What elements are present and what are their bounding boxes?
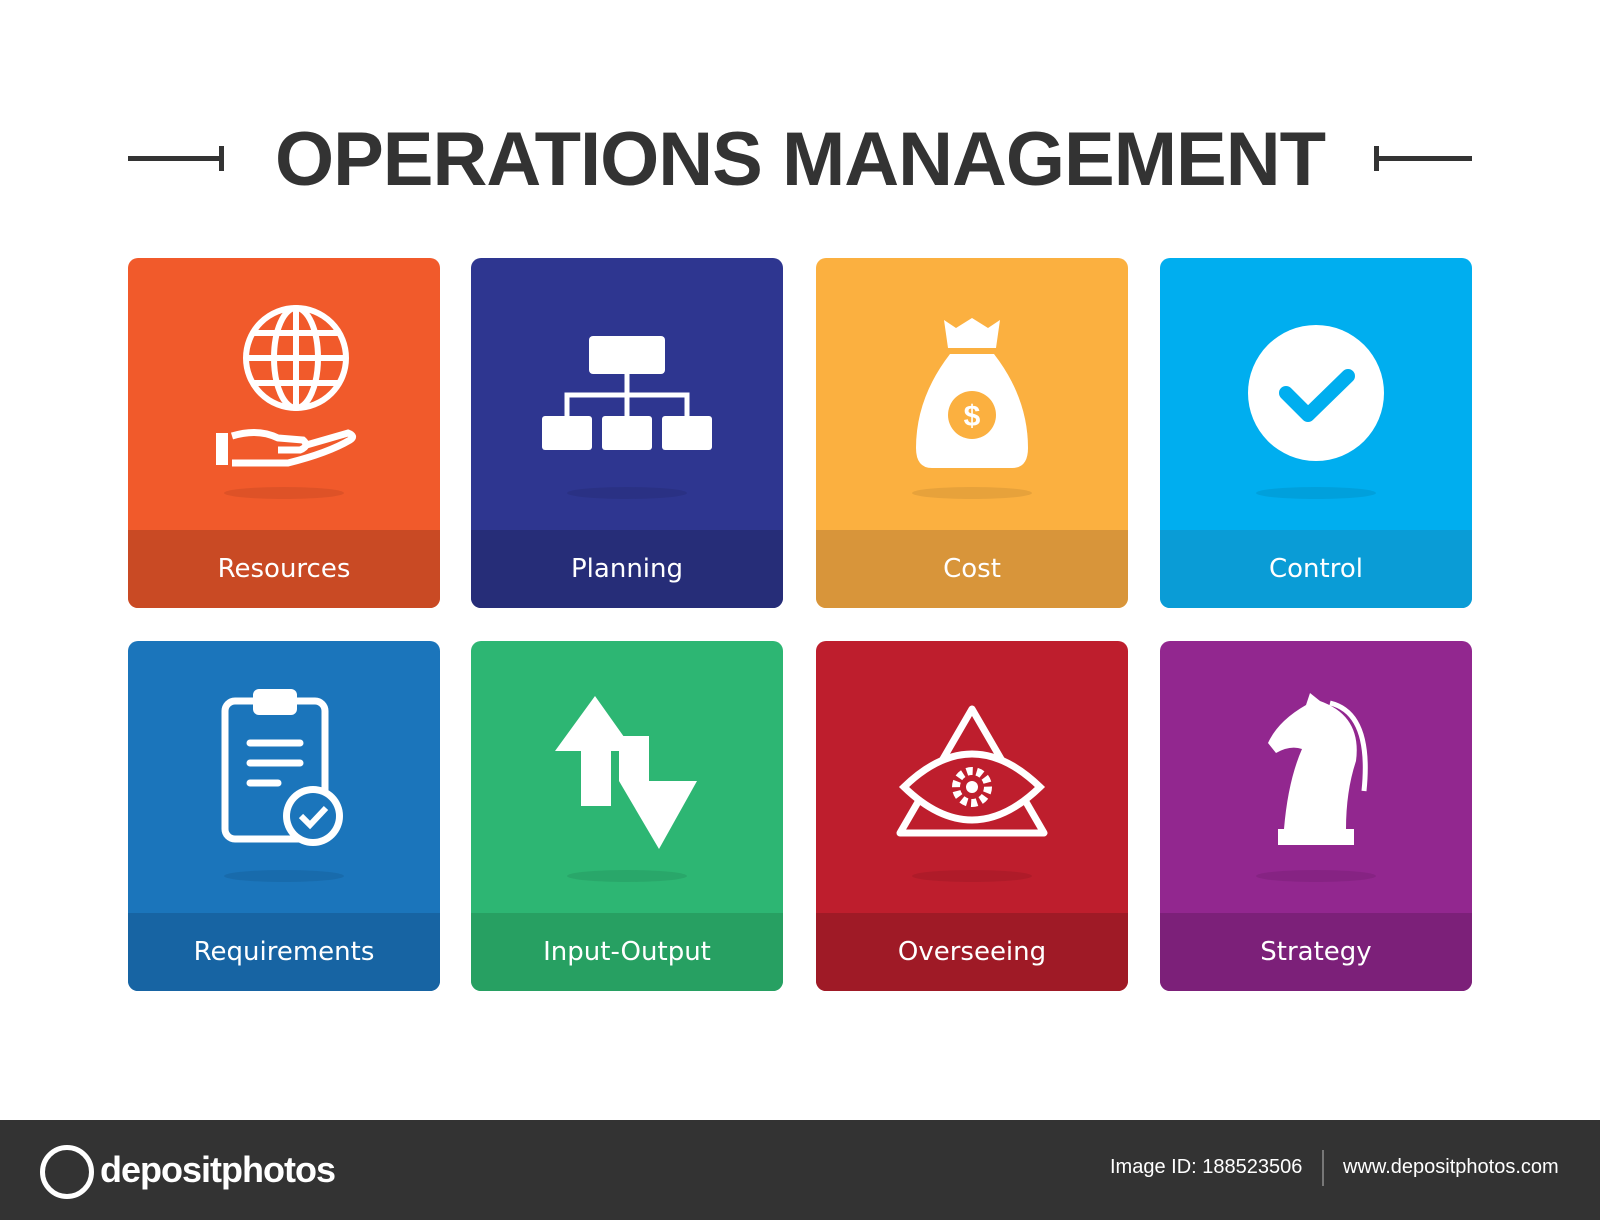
left title rule (128, 156, 224, 161)
icon: clipboard check (222, 689, 344, 882)
label: Strategy (1260, 937, 1372, 967)
logo (40, 1145, 335, 1199)
label (816, 530, 1128, 608)
label: Input-Output (543, 937, 711, 967)
label (471, 913, 783, 991)
icon: org chart (542, 336, 712, 499)
panel: overseeing (816, 641, 1128, 991)
logo: depositphotos (100, 1149, 335, 1190)
label: Overseeing (898, 937, 1046, 967)
panel: input-output (471, 641, 783, 991)
icon: up down arrows (555, 696, 697, 882)
icon: globe in hand (216, 305, 356, 499)
label (128, 913, 440, 991)
panel: cost (816, 258, 1128, 608)
footer bar (0, 1120, 1600, 1220)
website: www.depositphotos.com (1343, 1156, 1559, 1178)
panel: resources (128, 258, 440, 608)
label (471, 530, 783, 608)
label: Cost (943, 554, 1001, 584)
icon: check circle (1248, 325, 1384, 499)
panel: control (1160, 258, 1472, 608)
label (1160, 530, 1472, 608)
image id: Image ID: 188523506 (1110, 1156, 1302, 1178)
label (1160, 913, 1472, 991)
title: OPERATIONS MANAGEMENT (275, 117, 1325, 202)
label (128, 530, 440, 608)
label: Planning (571, 554, 683, 584)
panel: requirements (128, 641, 440, 991)
icon: money bag: $ (964, 400, 981, 433)
icon: eye in triangle (896, 706, 1048, 882)
label: Resources (218, 554, 350, 584)
icon: chess knight (1256, 693, 1376, 882)
label: Control (1269, 554, 1363, 584)
panel: planning (471, 258, 783, 608)
icon: money bag (912, 318, 1032, 499)
panel: strategy (1160, 641, 1472, 991)
right title rule (1374, 156, 1472, 161)
label (816, 913, 1128, 991)
label: Requirements (194, 937, 374, 967)
